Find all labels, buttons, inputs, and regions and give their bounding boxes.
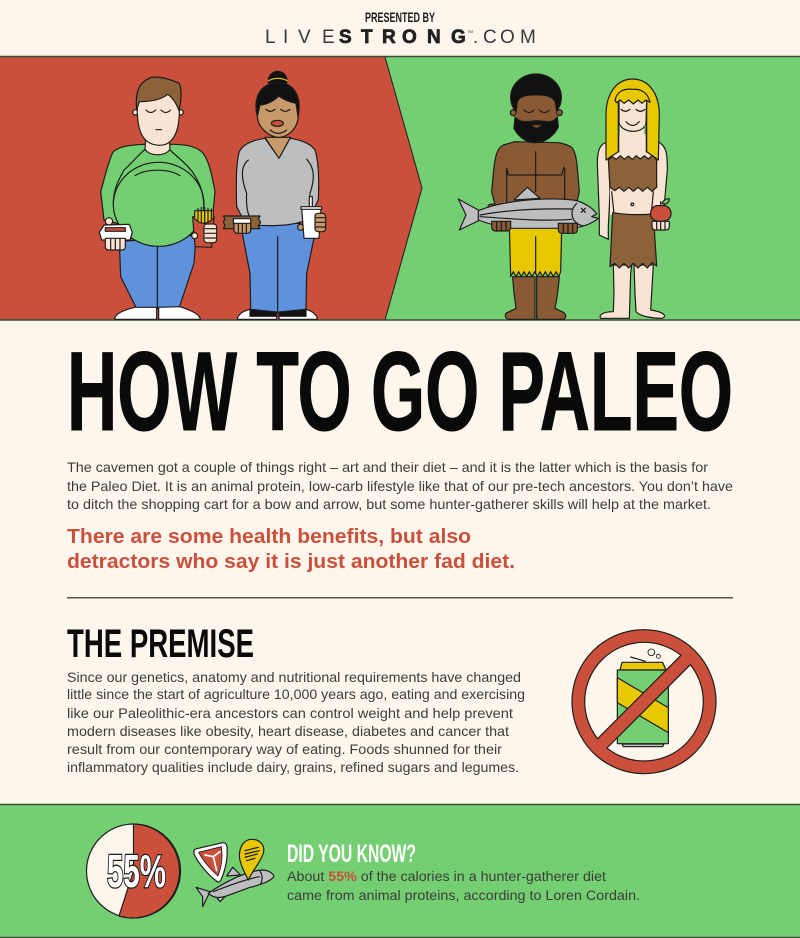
chart: 55 percent pie xyxy=(86,824,180,918)
premise text block: inflammatory qualities include dairy, grains, refined sugars and legumes. xyxy=(67,760,519,775)
header: presented by Livestrong logo: TM xyxy=(467,29,473,34)
chart: 55 percent pie: 55% xyxy=(107,845,166,897)
header: presented by Livestrong logo: .COM xyxy=(473,27,536,48)
premise text block: modern diseases like obesity, heart disease, diabetes and cancer that xyxy=(67,724,509,739)
premise text block: Since our genetics, anatomy and nutritional requirements have changed xyxy=(67,670,521,685)
heading: the premise: THE PREMISE xyxy=(67,622,254,666)
premise text block: result from our contemporary way of eating. Foods shunned for their xyxy=(67,742,502,757)
intro text block: the Paleo Diet. It is an animal protein, low-carb lifestyle like that of our pre-tech ancestors. You don’t have xyxy=(67,479,733,494)
illustration: caveman holding a fish xyxy=(458,74,598,319)
header: presented by Livestrong logo: PRESENTED BY xyxy=(365,9,435,25)
header: presented by Livestrong logo xyxy=(265,9,536,48)
red callout text: detractors who say it is just another fad diet. xyxy=(67,551,515,573)
intro text block: to ditch the shopping cart for a bow and arrow, but some hunter-gatherer skills will help at the market. xyxy=(67,497,711,512)
premise text block xyxy=(67,670,525,775)
header: presented by Livestrong logo: LIVE xyxy=(265,27,335,48)
icon: no soda can sign xyxy=(572,630,716,774)
premise text block: like our Paleolithic-era ancestors can control weight and help prevent xyxy=(67,706,513,721)
red callout text: There are some health benefits, but also xyxy=(67,526,471,548)
red callout text xyxy=(67,526,515,573)
heading: did you know: DID YOU KNOW? xyxy=(287,840,416,868)
did you know text: came from animal proteins, according to Loren Cordain. xyxy=(287,888,640,903)
banner: before and after illustration xyxy=(0,56,800,320)
illustration: overweight woman with candy bar and soda xyxy=(223,71,326,319)
illustration: overweight man with takeout food xyxy=(99,77,217,319)
intro text block xyxy=(67,460,733,512)
panel: did you know xyxy=(0,804,800,938)
illustration: cavewoman holding an apple xyxy=(597,79,671,318)
did you know text xyxy=(287,869,640,903)
icon: steak, lemon and fish xyxy=(194,839,274,907)
premise text block: little since the start of agriculture 10,000 years ago, eating and exercising xyxy=(67,687,525,702)
intro text block: The cavemen got a couple of things right – art and their diet – and it is the latter which is the basis for xyxy=(67,460,708,475)
did you know text: About 55% of the calories in a hunter-gatherer diet xyxy=(287,869,606,884)
header: presented by Livestrong logo: STRONG xyxy=(339,27,466,48)
